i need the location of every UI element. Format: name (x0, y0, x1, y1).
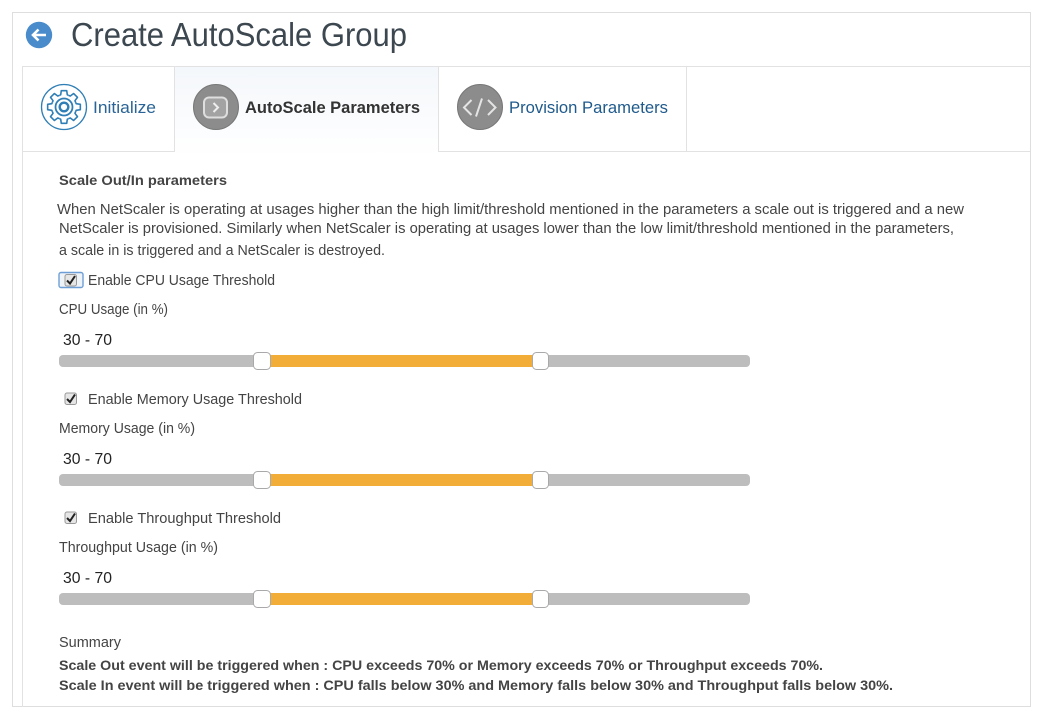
section: CPU threshold: CPU Usage (in %) (59, 302, 168, 318)
section: memory threshold: Memory Usage (in %) (59, 421, 195, 437)
section: CPU threshold: Enable CPU Usage Threshold (88, 273, 275, 289)
tab: Provision Parameters: Provision Parameters (509, 98, 668, 117)
section: memory threshold (59, 392, 750, 488)
summary: Scale Out event will be triggered when : CPU exceeds 70% or Memory exceeds 70% or Throughput exceeds 70%. (59, 657, 823, 673)
description text: a scale in is triggered and a NetScaler is destroyed. (59, 243, 385, 259)
section: throughput threshold: Throughput Usage (in %) (59, 540, 218, 556)
section: memory threshold: 30 - 70 (63, 451, 112, 468)
section: memory threshold: Enable Memory Usage Threshold (88, 392, 302, 408)
summary: Scale In event will be triggered when : CPU falls below 30% and Memory falls below 30% and Throughput falls below 30%. (59, 677, 893, 693)
slider: memory (59, 472, 750, 488)
summary: Summary (59, 635, 122, 651)
section: CPU threshold (59, 272, 750, 370)
heading: scale out/in parameters: Scale Out/In parameters (59, 172, 227, 188)
section: throughput threshold: Enable Throughput Threshold (88, 511, 281, 527)
description text: When NetScaler is operating at usages higher than the high limit/threshold mentioned in the parameters a scale out is triggered and a new (57, 202, 965, 218)
icon: back arrow (26, 22, 52, 48)
description text: NetScaler is provisioned. Similarly when NetScaler is operating at usages lower than the low limit/threshold mentioned in the parameters, (59, 221, 954, 237)
tab: AutoScale Parameters background (175, 67, 438, 157)
title: Create AutoScale Group (71, 16, 407, 53)
tab: AutoScale Parameters (194, 84, 420, 130)
slider: throughput (59, 590, 750, 608)
checkbox: memory (65, 393, 76, 404)
checkbox: CPU (59, 272, 83, 288)
summary (59, 635, 893, 693)
section: CPU threshold: 30 - 70 (63, 332, 112, 349)
slider: CPU (59, 352, 750, 370)
tab: Provision Parameters (458, 84, 668, 130)
checkbox: throughput (65, 512, 76, 524)
section: throughput threshold: 30 - 70 (63, 570, 112, 587)
description text (57, 202, 965, 259)
tab: Initialize: Initialize (93, 98, 156, 117)
tab: AutoScale Parameters: AutoScale Parameters (245, 98, 420, 117)
section: throughput threshold (59, 511, 750, 608)
tab: Initialize (42, 84, 156, 130)
